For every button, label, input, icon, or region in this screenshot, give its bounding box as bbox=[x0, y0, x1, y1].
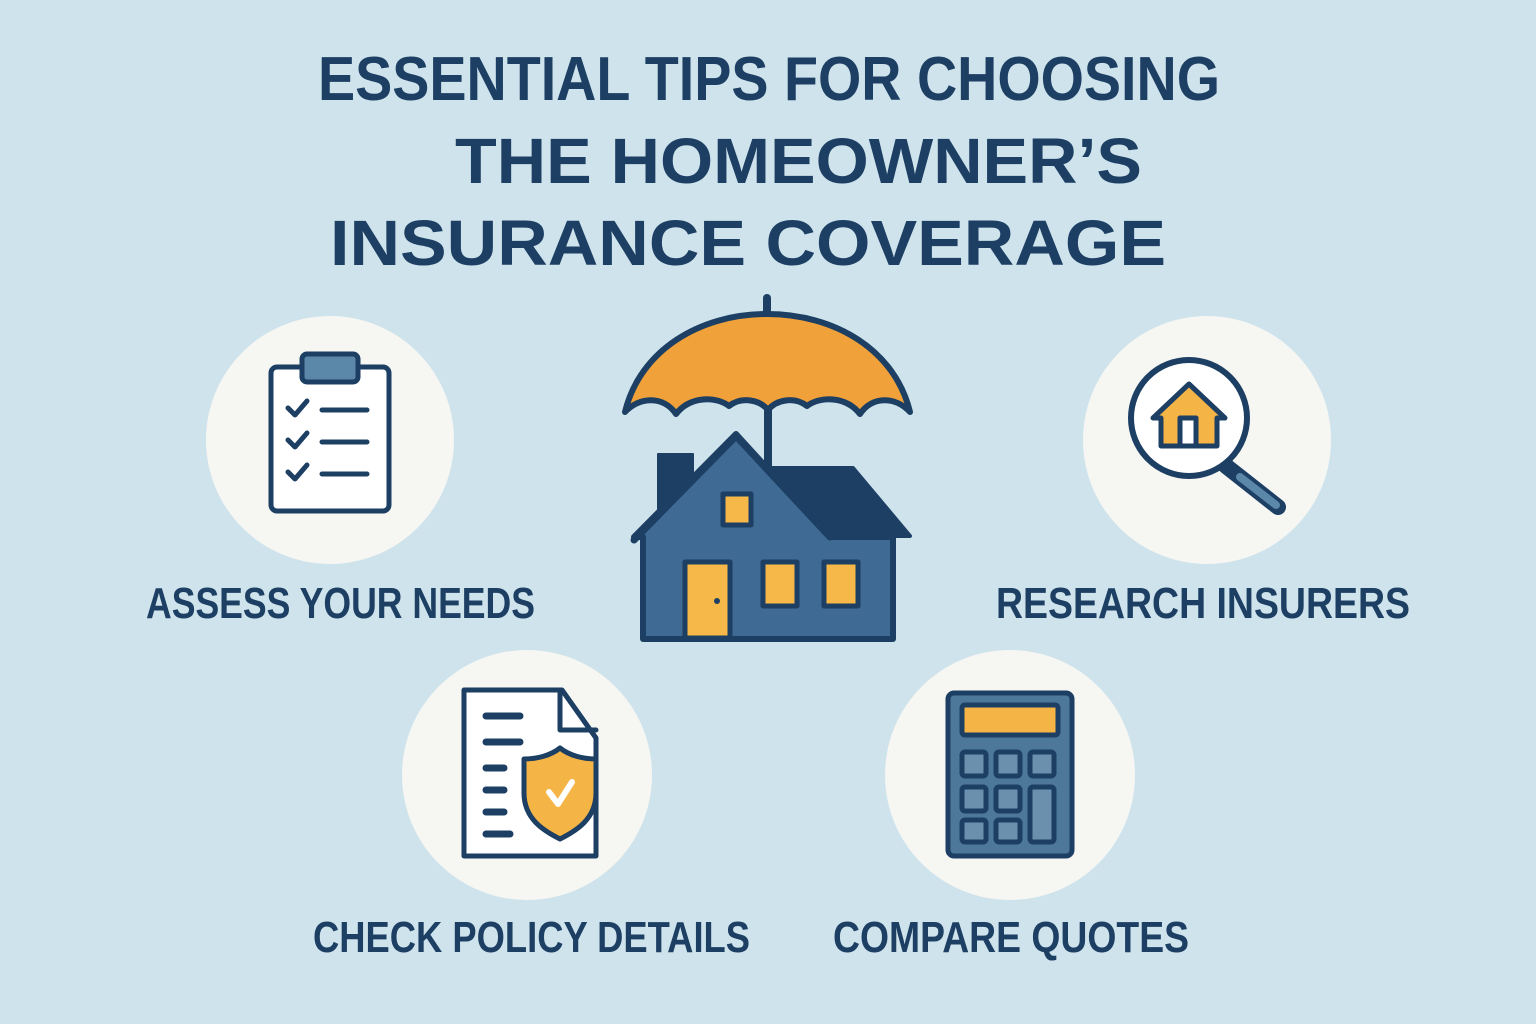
icon: clipboard checklist bbox=[271, 354, 389, 511]
label: assess your needs: ASSESS YOUR NEEDS bbox=[146, 579, 535, 628]
icon: calculator bbox=[948, 693, 1072, 856]
panel: compare quotes bbox=[833, 650, 1189, 962]
title: INSURANCE COVERAGE bbox=[330, 207, 1166, 279]
title: ESSENTIAL TIPS FOR CHOOSING bbox=[318, 45, 1220, 114]
icon: magnifier house bbox=[1131, 360, 1278, 507]
label: research insurers: RESEARCH INSURERS bbox=[996, 579, 1410, 628]
label: check policy details: CHECK POLICY DETAILS bbox=[313, 913, 750, 962]
icon: house under umbrella bbox=[625, 298, 910, 639]
title: THE HOMEOWNER’S bbox=[455, 125, 1142, 197]
panel: assess your needs bbox=[146, 316, 535, 628]
panel: research insurers bbox=[996, 316, 1410, 628]
panel: check policy details bbox=[313, 650, 750, 962]
title bbox=[318, 45, 1220, 279]
label: compare quotes: COMPARE QUOTES bbox=[833, 913, 1189, 962]
icon: document with shield bbox=[464, 690, 596, 856]
